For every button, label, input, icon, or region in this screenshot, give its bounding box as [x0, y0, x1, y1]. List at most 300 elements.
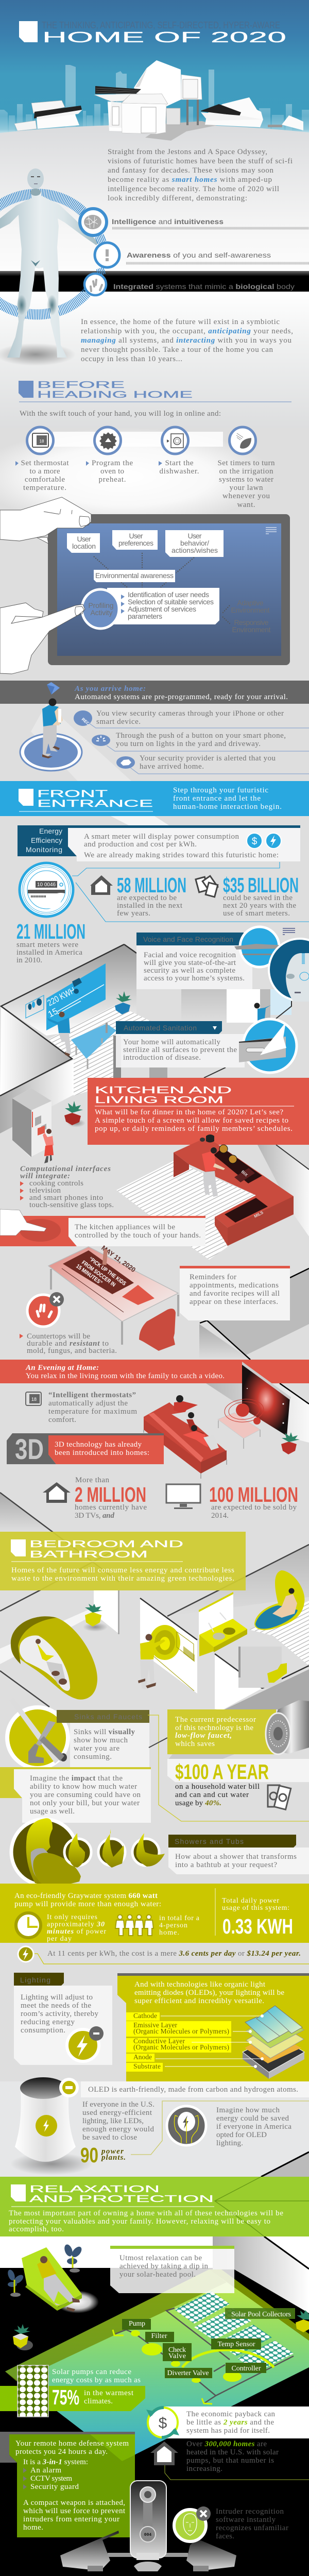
panel: remote home defense: [0, 2432, 135, 2537]
task: oven: preheat.: [99, 476, 126, 484]
icon: bolt: [266, 833, 281, 849]
text: 300000 homes: [150, 2440, 309, 2480]
band: as you arrive home: As you arrive home:: [74, 685, 146, 693]
task: thermostat: temperature.: [23, 484, 66, 492]
kitchen counter: [174, 1134, 294, 1246]
band: graywater: It only requires: [47, 1913, 97, 1921]
red chair: [139, 1309, 176, 1351]
callout: automated sanitation: sterilize all surfaces to prevent the: [123, 1046, 237, 1054]
panel: remote home defense: Security guard: [30, 2483, 79, 2491]
line: cost per day: [18, 1946, 309, 1964]
text: intruder recognition: software instantly: [216, 2516, 276, 2524]
paragraph: symbiotic: relationship with you, the occupant, anticipating your needs,: [81, 327, 293, 335]
box: user location: [67, 533, 100, 553]
connector: faucet: [148, 1715, 309, 1821]
text: computational interfaces: [20, 1165, 114, 1209]
panel: energy monitoring: A smart meter will display power consumption: [84, 833, 239, 841]
adaptive environment: [231, 599, 271, 634]
panel: remote home defense: home.: [23, 2523, 43, 2532]
band: graywater: in total for a: [159, 1914, 200, 1922]
callout: lighting: consumption.: [21, 2026, 65, 2035]
icon: shower head: [266, 1700, 309, 1754]
box: user preferences: [112, 530, 158, 550]
calendar table: [48, 1244, 178, 1345]
text: computational interfaces: and smart phones into: [29, 1194, 103, 1202]
list item 3: Integrated systems that mimic a biological body: [113, 282, 295, 291]
text: intruder recognition: [216, 2507, 288, 2540]
callout: automated sanitation: [116, 1019, 297, 1073]
text: intruder recognition: Intruder recognition: [216, 2507, 284, 2516]
smart meter: [20, 863, 73, 917]
icon: face recognition: [174, 2506, 211, 2541]
heading: before heading home: BEFORE: [37, 379, 125, 390]
calendar table: “PICK UP THE KIDS: [88, 1256, 127, 1287]
text: power plants: power: [100, 2147, 124, 2156]
layer labels: Conductive Layer: [133, 2037, 185, 2045]
list item 2: Awareness of you and self-awareness: [127, 251, 271, 259]
icon: money: [196, 876, 218, 897]
wall screen: 15: [46, 1006, 60, 1020]
callout: sinks and faucets: consuming.: [74, 1753, 112, 1761]
OLED note: OLED is earth-friendly, made from carbon and hydrogen atoms.: [88, 2086, 298, 2094]
pipes: [115, 2308, 294, 2403]
circle: profiling activity: Activity: [91, 608, 112, 617]
calendar table: FROM SOCCER IN: [80, 1260, 116, 1288]
callout: voice and face recognition: Facial and voice recognition: [144, 951, 236, 959]
intro text: [108, 148, 293, 202]
hologram table: [218, 1398, 265, 1449]
layer labels: Anode: [133, 2053, 152, 2061]
item: yard lights: Through the push of a button on your smart phone,: [116, 732, 286, 740]
panel: reminders: [180, 1266, 290, 1320]
text: computational interfaces: Computational interfaces: [20, 1165, 111, 1173]
smart meter: 10 0046: [37, 882, 56, 888]
calendar table: MAY 11, 2020: [100, 1244, 137, 1274]
box: environmental awareness: [94, 570, 175, 582]
text: intelligent thermostats: comfort.: [48, 1416, 76, 1424]
pool deck: [5, 2269, 309, 2461]
illustration: shower transforming: [11, 1818, 165, 1886]
panel: economic payback: $: [159, 2415, 167, 2432]
band: graywater: 4-person: [159, 1922, 187, 1929]
task: oven: [86, 427, 133, 484]
person: cook: [202, 1147, 225, 1197]
banner: front entrance: Step through your futuristic: [173, 786, 268, 794]
solar pumps: Solar pumps can reduce: [52, 2368, 131, 2376]
glass table: [71, 1023, 116, 1069]
panel: low-flow faucet: low-flow faucet,: [175, 1732, 232, 1740]
panel: utmost relaxation: [110, 2246, 234, 2293]
banner: front entrance: human-home interaction begin.: [173, 803, 282, 811]
panel: economic payback: be little as 2 years and the: [186, 2418, 274, 2427]
text: power plants: used energy-efficient: [82, 2109, 152, 2117]
icon: four people: [115, 1914, 153, 1936]
callout: showers and tubs: into a bathtub at your request?: [175, 1861, 277, 1869]
heading: before heading home: [19, 379, 291, 402]
panel: utmost relaxation: Utmost relaxation can be: [119, 2254, 202, 2262]
connector stripes: [96, 235, 105, 243]
labels: Solar Pool Collectors: [231, 2311, 291, 2318]
wedge wall: [213, 2236, 309, 2313]
panel: imagine the impact: [0, 1767, 151, 1823]
text: power plants: [80, 2100, 154, 2167]
solar pumps: [0, 2365, 145, 2417]
stat: 58 million: few years.: [117, 909, 150, 918]
plant: blue pot: [115, 991, 132, 1014]
banner: front entrance: ENTRANCE: [37, 799, 153, 809]
box: user behavior: [165, 530, 224, 557]
text: intelligent thermostats: “Intelligent thermostats”: [48, 1391, 136, 1399]
intro text: become reality as smart homes with amped-up: [108, 176, 272, 184]
stat: 58 million: [90, 873, 186, 918]
panel: remote home defense: Your remote home defense system: [15, 2439, 129, 2448]
line: cost per day: At 11 cents per kWh, the cost is a mere 3.6 cents per day or $13.24 per year.: [47, 1950, 301, 1958]
labels: Diverter Valve: [167, 2369, 209, 2377]
band: graywater: approximately 30: [47, 1921, 105, 1928]
light floor ray: [31, 704, 170, 816]
stat: 2 million: [43, 1476, 147, 1520]
circle: faucet: [7, 1698, 68, 1768]
stat: 58 million: are expected to be: [117, 894, 177, 902]
banner: relaxation and protection: AND PROTECTION: [29, 2193, 214, 2204]
banner: front entrance: front entrance and let the: [173, 794, 261, 803]
paragraph: symbiotic: occupy in less than 10 years...: [81, 355, 182, 363]
man at sanitizer window: [254, 1003, 271, 1021]
sleep pod: [11, 1616, 97, 1700]
band: as you arrive home: [0, 681, 309, 704]
fridge: [12, 1088, 52, 1157]
band: an evening at home: [0, 1360, 309, 1383]
person: [43, 724, 58, 758]
stat: 21 million: 21 MILLION: [16, 920, 85, 943]
panel: OLED: emitting diodes (OLEDs), your lighting will be: [134, 1989, 284, 1997]
panel: economic payback: The economic payback can: [186, 2410, 275, 2418]
callout: automated sanitation: Your home will automatically: [123, 1038, 220, 1046]
panel: ground: [0, 125, 309, 428]
wall: living room: [199, 1268, 309, 1443]
solar pumps: energy costs by as much as: [52, 2376, 141, 2384]
right house: [201, 97, 263, 127]
item: security provider: have arrived home.: [140, 762, 204, 771]
icon: title tab: [19, 21, 38, 42]
solar pumps: 75%: [52, 2385, 79, 2409]
screen: [57, 523, 281, 656]
stat: 21 million: installed in America: [16, 948, 82, 957]
circle: profiling activity: Profiling: [89, 601, 113, 609]
panel: imagine the impact: not only your bill, but your water: [30, 1799, 140, 1807]
tablet: [48, 514, 290, 665]
stat: 21 million: smart meters were: [16, 941, 78, 949]
panel: energy monitoring: Energy: [39, 827, 62, 835]
callout: voice and face recognition: will give you state-of-the-art: [144, 959, 236, 967]
item: yard lights: [92, 732, 309, 751]
paragraph: symbiotic: never thought possible. Take a tour of the home you can: [81, 346, 273, 354]
stat: 21 million: in 2010.: [16, 956, 42, 964]
task: irrigation: Set timers to turn: [217, 459, 275, 467]
face scan: [269, 939, 309, 1002]
panel: low-flow faucet: of this technology is the: [175, 1724, 253, 1732]
text: intelligent thermostats: temperature for maximum: [48, 1408, 137, 1416]
dotted connectors: [94, 553, 231, 624]
stat: 58 million: 58 MILLION: [117, 873, 186, 897]
icon: clock: [16, 1913, 41, 1938]
labels: Temp Sensor: [217, 2341, 255, 2348]
stat: 2 million: 3D TVs, and: [75, 1512, 114, 1520]
text: countertops: Countertops will be: [27, 1332, 90, 1341]
kitchen floor details: [12, 1088, 309, 1260]
panel: low-flow faucet: [167, 1700, 309, 1754]
panel: energy monitoring: and production and cost per kWh.: [84, 840, 197, 849]
banner: kitchen and living room: [88, 1078, 309, 1145]
band: graywater: usage of this system:: [222, 1904, 289, 1912]
box: profiling steps: [107, 588, 219, 624]
panel: imagine the impact: usage as well.: [30, 1807, 75, 1816]
connector: OLED: [131, 2101, 309, 2155]
title: [19, 20, 286, 46]
wall: upper right corner: [261, 2152, 309, 2177]
labels: Check: [168, 2346, 186, 2354]
panel: remote home defense: It is a 3-in-1 system:: [23, 2458, 88, 2466]
stat: 100 a year: and can and cut water: [175, 1791, 249, 1799]
panel: sky: [0, 0, 309, 135]
labels: Pump: [129, 2320, 145, 2328]
icon: fingers circle: [84, 274, 106, 295]
banner: relaxation and protection: [0, 2177, 309, 2236]
black band: [0, 271, 309, 292]
panel: OLED: And with technologies like organic light: [134, 1980, 266, 1989]
text: power plants: If everyone in the U.S.: [82, 2100, 154, 2109]
banner: bedroom and bathroom: Homes of the future will consume less energy and contribute less: [11, 1566, 234, 1574]
stat: 100 million: are expected to be sold by: [211, 1503, 297, 1512]
banner: front entrance: FRONT: [37, 789, 108, 800]
white strip: [0, 2236, 309, 2268]
callout: voice and face recognition: security as well as complete: [144, 967, 235, 975]
text: imagine energy: opted for OLED: [216, 2131, 267, 2139]
task: thermostat: to a more: [30, 467, 60, 476]
panel: kitchen appliances: [0, 1209, 205, 1246]
stat: 35 billion: [196, 873, 299, 918]
platform: [20, 734, 82, 771]
task: irrigation: want.: [237, 501, 255, 509]
callout: showers and tubs: How about a shower that transforms: [175, 1853, 297, 1861]
callout: sinks and faucets: Sinks and Faucets: [74, 1713, 142, 1721]
projection screen: [242, 1362, 291, 1436]
callout: lighting: reducing energy: [21, 2018, 75, 2026]
text: imagine energy: lighting.: [216, 2139, 243, 2147]
band: as you arrive home: Automated systems are pre-programmed, ready for your arrival.: [75, 693, 288, 701]
icon: bolt with minus: [67, 2026, 104, 2061]
kitchen counter: BIX: [241, 1170, 249, 1178]
wall screen: 220 KWH: [46, 986, 77, 1008]
icon: awareness circle: [95, 243, 119, 267]
stat: 2 million: homes currently have: [75, 1503, 147, 1512]
icon: solar panel: [18, 2365, 48, 2417]
banner: kitchen and living room: LIVING ROOM: [95, 1094, 224, 1105]
stat: 58 million: installed in the next: [117, 902, 183, 910]
panel: imagine the impact: Imagine the impact that the: [30, 1774, 123, 1783]
main title: HOME OF 2020: [42, 29, 286, 46]
adaptive environment: Environment: [231, 606, 270, 614]
panel: energy monitoring: We are already making strides toward this futuristic home:: [84, 851, 279, 859]
panel: remote home defense: An alarm: [30, 2466, 61, 2475]
panel: low-flow faucet: which saves: [175, 1740, 215, 1748]
main shadow: [145, 121, 217, 141]
callout: 3D technology: 3D technology has already: [55, 1440, 142, 1449]
text: 300000 homes: pumps, but that number is: [186, 2456, 274, 2465]
plants on terrace: [13, 2310, 309, 2350]
task: oven: Program the: [92, 459, 133, 467]
panel: energy monitoring: Efficiency: [31, 836, 62, 844]
callout: 3D technology: 3D: [15, 1433, 44, 1465]
item: security provider: [116, 754, 309, 774]
band: graywater: Total daily power: [222, 1897, 279, 1905]
text: imagine energy: Imagine how much: [216, 2106, 280, 2114]
callout: automated sanitation: introduction of disease.: [123, 1054, 201, 1062]
fans: [7, 2243, 83, 2297]
text: power plants: enough energy would: [82, 2125, 154, 2133]
intro text: intelligence become reality. The home of 2020 will: [108, 185, 279, 193]
stat: 100 a year: [167, 1754, 309, 1809]
text: 300000 homes: heated in the U.S. with solar: [186, 2448, 279, 2456]
panel: remote home defense: CCTV system: [30, 2475, 72, 2483]
icon: door handle: [239, 1019, 297, 1073]
human body: [0, 168, 98, 358]
OLED note: [81, 2081, 309, 2097]
text: 300000 homes: Over 300,000 homes are: [186, 2440, 267, 2448]
panel: remote home defense: protects you 24 hours a day.: [15, 2448, 108, 2456]
wall screen: [26, 963, 106, 1030]
text: intruder recognition: faces.: [216, 2532, 234, 2540]
task: oven: oven to: [100, 467, 124, 476]
layer labels: Emissive Layer: [133, 2021, 177, 2029]
callout: sinks and faucets: Sinks will visually: [74, 1728, 135, 1736]
solar collectors: [175, 2291, 294, 2371]
banner: relaxation and protection: The most important part of owning a home with all of these technologies will be: [9, 2209, 283, 2217]
text: power plants: plants.: [100, 2154, 126, 2162]
text: intelligent thermostats: [26, 1391, 137, 1424]
banner: bedroom and bathroom: waste to the environment with their amazing green technologies.: [11, 1574, 234, 1583]
task: irrigation: [217, 427, 275, 509]
text: intelligent thermostats: automatically adjust the: [48, 1399, 128, 1408]
calendar table: 15 MINUTES”: [75, 1263, 104, 1286]
people: [174, 1401, 198, 1414]
intro text: and fantasy for decades. These visions may soon: [108, 166, 274, 175]
banner: bedroom and bathroom: [0, 1532, 246, 1590]
bathtub pod: [254, 1570, 304, 1630]
list item 1: Intelligence and intuitiveness: [112, 217, 224, 226]
band: an evening at home: An Evening at Home:: [25, 1364, 99, 1372]
toilet: [267, 1663, 287, 1683]
kitchen counter: MILS: [253, 1210, 264, 1219]
labels: Filter: [151, 2332, 167, 2340]
plant: red pot lower: [281, 1432, 300, 1454]
callout: sinks and faucets: [57, 1710, 149, 1767]
text: countertops: durable and resistant to: [27, 1340, 109, 1348]
box: user location: User: [77, 535, 91, 543]
callout: lighting: room’s activity, thereby: [21, 2010, 99, 2018]
solar pumps: climates.: [84, 2397, 113, 2405]
task: irrigation: whenever you: [222, 492, 270, 500]
item: security cameras: REC: [81, 717, 91, 726]
item: security cameras: You view security cameras through your iPhone or other: [96, 709, 284, 718]
box: user preferences: User: [129, 532, 143, 540]
banner: relaxation and protection: RELAXATION: [29, 2183, 160, 2194]
panel: reminders: and favorite recipes will all: [190, 1290, 280, 1298]
panel: energy monitoring: [18, 825, 300, 861]
item: security cameras: [74, 709, 309, 728]
banner: kitchen and living room: What will be for dinner in the home of 2020? Let’s see?: [95, 1108, 283, 1116]
panel: kitchen appliances: The kitchen appliances will be: [75, 1223, 175, 1231]
text: countertops: [20, 1332, 117, 1355]
text: imagine energy: if everyone in America: [216, 2123, 291, 2131]
layer labels: (Organic Molecules or Polymers): [133, 2027, 229, 2035]
layer labels: [126, 2012, 264, 2072]
task: irrigation: on the irrigation: [219, 467, 273, 476]
left house: [14, 100, 82, 131]
interactive wall with person: [138, 1598, 197, 1693]
callout: showers and tubs: [168, 1835, 309, 1874]
circle: profiling activity: [82, 589, 119, 629]
task: dishwasher: [159, 427, 199, 476]
callout: 3D technology: been introduced into homes:: [55, 1449, 149, 1457]
text: power plants: 90: [80, 2143, 98, 2167]
callout: 3D technology: [7, 1433, 164, 1465]
item: security cameras: smart device.: [96, 718, 141, 726]
callout: voice and face recognition: Voice and Face Recognition: [143, 935, 233, 943]
security turret: 004: [144, 2533, 151, 2537]
box: user behavior: actions/wishes: [171, 546, 218, 554]
sofa with family: [144, 1395, 227, 1479]
banner: front entrance: [0, 781, 309, 816]
panel: economic payback: system has paid for itself.: [186, 2427, 270, 2435]
icon: countertop fingers: [27, 1292, 64, 1327]
callout: showers and tubs: Showers and Tubs: [175, 1837, 244, 1845]
heading: before heading home: HEADING HOME: [37, 389, 193, 400]
stat: 100 a year: $100 A YEAR: [175, 1760, 269, 1784]
panel: OLED: super efficient and incredibly versatile.: [134, 1997, 264, 2005]
illustration: houses: [14, 60, 303, 141]
task: thermostat: Set thermostat: [21, 459, 69, 467]
banner: relaxation and protection: protecting your valuables and your family. However, relaxing will be easy to: [9, 2217, 270, 2226]
task: dishwasher: Start the: [165, 459, 194, 467]
diamond icon: [47, 682, 60, 694]
hand: [0, 1209, 46, 1235]
callout: automated sanitation: Automated Sanitation: [124, 1024, 197, 1032]
icon: scanner: [234, 927, 285, 967]
task: thermostat: comfortable: [25, 476, 65, 484]
stat: 100 a year: on a household water bill: [175, 1783, 260, 1791]
box: user location: location: [72, 542, 96, 550]
adaptive environment: Adaptive: [237, 599, 264, 607]
text: imagine energy: [216, 2106, 291, 2147]
callout: voice and face recognition: [136, 927, 309, 1002]
band: graywater: per day: [47, 1935, 72, 1943]
box: profiling steps: Adjustment of services: [128, 605, 196, 613]
security turret: [60, 2481, 236, 2571]
callout: lighting: Lighting will adjust to: [21, 1993, 93, 2002]
band: graywater: [0, 1884, 309, 1943]
intro text: visions of futuristic homes have been the stuff of sci-fi: [108, 157, 293, 165]
labels: Valve: [168, 2352, 186, 2360]
band: graywater: minutes of power: [47, 1928, 106, 1936]
intro text: Straight from the Jestons and A Space Odyssey,: [108, 148, 267, 156]
icon: hands with bolt: [167, 2106, 206, 2145]
task: irrigation: your lawn: [230, 484, 263, 492]
paragraph: symbiotic: managing all systems, and interacting with you in ways you: [81, 336, 291, 345]
panel: reminders: appointments, medications: [190, 1281, 279, 1290]
banner: bedroom and bathroom: BEDROOM AND: [29, 1538, 183, 1549]
callout: sinks and faucets: water you are: [74, 1744, 119, 1753]
